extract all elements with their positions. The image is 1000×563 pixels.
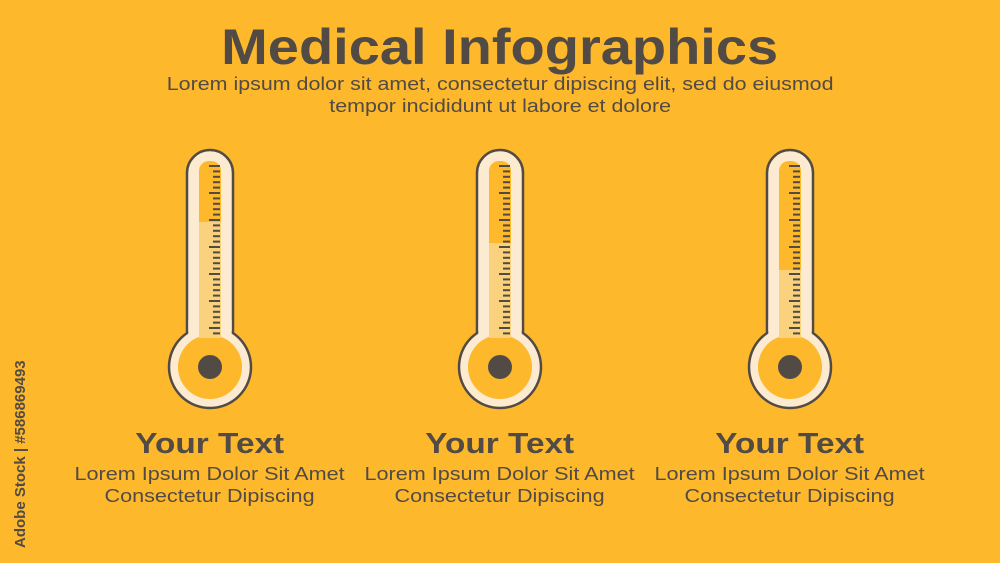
subtitle (167, 74, 833, 116)
text block 2: Consectetur Dipiscing (395, 486, 605, 506)
text block 3: Lorem Ipsum Dolor Sit Amet (655, 464, 925, 484)
text block 3: Your Text (716, 428, 864, 460)
thermometer 3 (749, 150, 831, 408)
watermark id: Adobe Stock | #586869493 (12, 360, 29, 548)
thermometer 1 (169, 150, 251, 408)
text block 1: Lorem Ipsum Dolor Sit Amet (75, 464, 345, 484)
text block 2: Lorem Ipsum Dolor Sit Amet (365, 464, 635, 484)
text block 2: Your Text (426, 428, 574, 460)
text block 3: Consectetur Dipiscing (685, 486, 895, 506)
text block 1: Your Text (136, 428, 284, 460)
text block 2 (365, 428, 635, 506)
title: Medical Infographics (221, 19, 778, 75)
subtitle: tempor incididunt ut labore et dolore (329, 96, 671, 116)
text block 1: Consectetur Dipiscing (105, 486, 315, 506)
text block 1 (75, 428, 345, 506)
subtitle: Lorem ipsum dolor sit amet, consectetur dipiscing elit, sed do eiusmod (167, 74, 833, 94)
thermometer 2 (459, 150, 541, 408)
text block 3 (655, 428, 925, 506)
